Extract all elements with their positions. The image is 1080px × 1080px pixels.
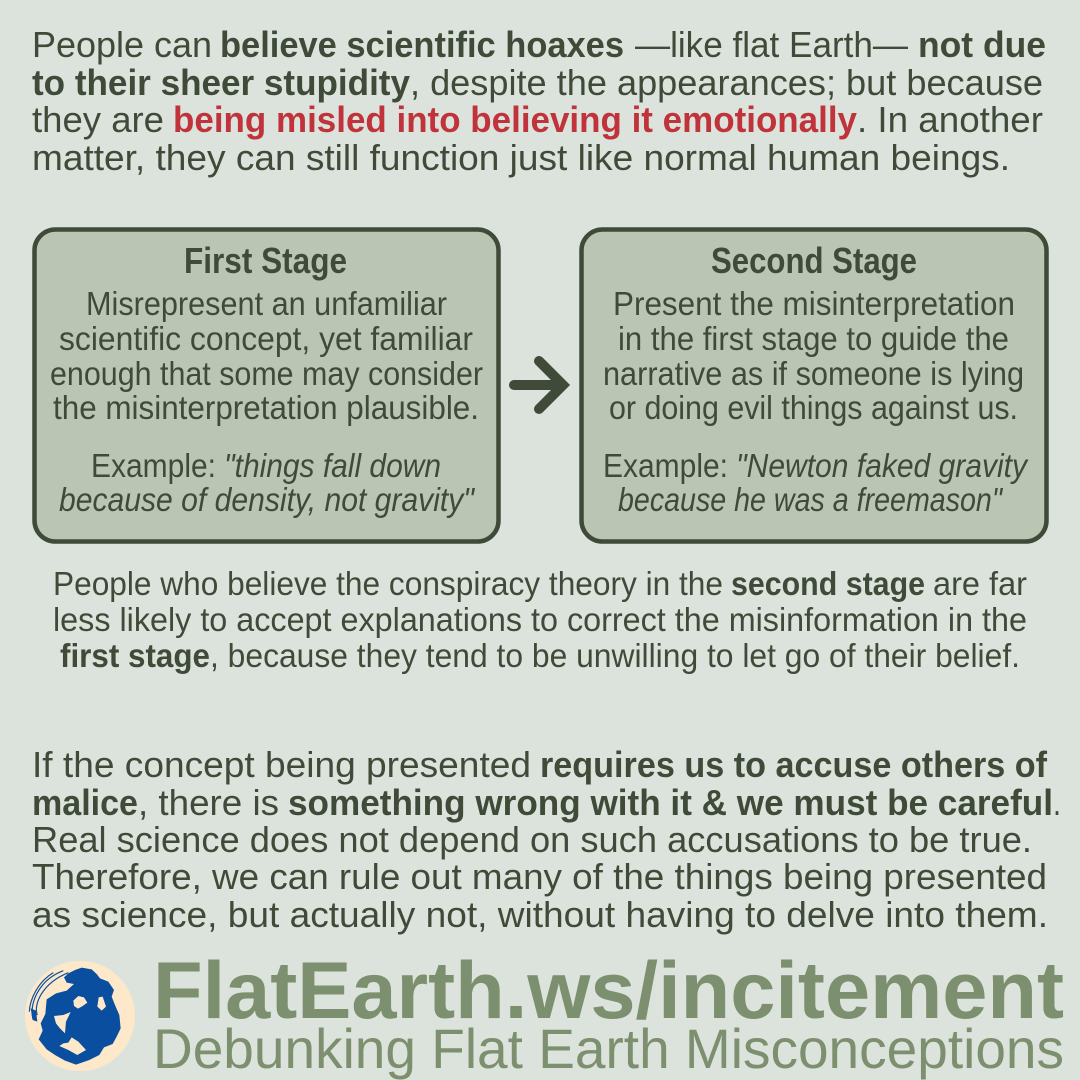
intro paragraph: not due — [918, 24, 1046, 65]
intro paragraph: People can — [32, 24, 212, 65]
intro paragraph: . In another — [857, 99, 1043, 140]
middle paragraph: People who believe the conspiracy theory in the — [53, 565, 723, 602]
intro paragraph: , despite the appearances; but because — [410, 62, 1043, 103]
conclusion paragraph: as science, but actually not, without having to delve into them. — [32, 894, 1048, 935]
arrow — [514, 361, 563, 409]
text: second stage description: in the first stage to guide the — [618, 320, 1009, 357]
conclusion paragraph: Real science does not depend on such accusations to be true. — [32, 819, 1032, 860]
intro paragraph: believe scientific hoaxes — [220, 24, 624, 65]
text: first stage example: "things fall down — [224, 447, 441, 484]
text: second stage description: or doing evil things against us. — [609, 389, 1018, 426]
middle paragraph: less likely to accept explanations to correct the misinformation in the — [53, 601, 1027, 638]
panel: first stage — [34, 230, 498, 542]
conclusion paragraph: requires us to accuse others of — [540, 744, 1048, 785]
heading: second stage: Second Stage — [711, 240, 917, 281]
text: second stage description: Present the misinterpretation — [613, 285, 1015, 322]
middle paragraph: first stage — [60, 637, 210, 674]
middle paragraph: second stage — [731, 565, 925, 602]
text: first stage description: enough that some may consider — [50, 355, 483, 392]
footer title: FlatEarth.ws/incitement — [153, 946, 1064, 1036]
middle paragraph: are far — [933, 565, 1027, 602]
text: second stage example: Example: — [603, 447, 728, 484]
intro paragraph: they are — [32, 99, 164, 140]
intro paragraph: to their sheer stupidity — [32, 62, 411, 103]
conclusion paragraph: , there is — [138, 782, 279, 823]
conclusion paragraph — [32, 744, 1061, 935]
middle paragraph — [53, 565, 1027, 674]
text: second stage example: "Newton faked gravity — [736, 447, 1029, 484]
intro paragraph: matter, they can still function just like normal human beings. — [32, 137, 1010, 178]
middle paragraph: , because they tend to be unwilling to let go of their belief. — [210, 637, 1020, 674]
icon: flat earth globe logo — [25, 961, 135, 1071]
intro paragraph — [32, 24, 1046, 178]
text: first stage description — [50, 285, 483, 426]
text: second stage description — [603, 285, 1024, 426]
heading: first stage: First Stage — [184, 240, 347, 281]
text: second stage description: narrative as if someone is lying — [603, 355, 1024, 392]
conclusion paragraph: . — [1053, 782, 1061, 823]
text: first stage description: Misrepresent an unfamiliar — [86, 285, 447, 322]
conclusion paragraph: something wrong with it & we must be careful — [288, 782, 1053, 823]
text: first stage description: the misinterpretation plausible. — [53, 389, 479, 426]
conclusion paragraph: malice — [32, 782, 138, 823]
text: first stage example: Example: — [91, 447, 216, 484]
conclusion paragraph: Therefore, we can rule out many of the things being presented — [32, 856, 1047, 897]
text: second stage example — [603, 447, 1029, 518]
text: first stage description: scientific concept, yet familiar — [59, 320, 473, 357]
conclusion paragraph: If the concept being presented — [32, 744, 531, 785]
text: first stage example — [59, 447, 475, 518]
panel: second stage — [582, 230, 1046, 542]
text: first stage example: because of density, not gravity" — [59, 481, 475, 518]
footer subtitle: Debunking Flat Earth Misconceptions — [153, 1017, 1064, 1080]
intro paragraph: —like flat Earth— — [635, 24, 908, 65]
intro paragraph: being misled into believing it emotionally — [173, 99, 858, 140]
text: second stage example: because he was a freemason" — [618, 481, 1003, 518]
